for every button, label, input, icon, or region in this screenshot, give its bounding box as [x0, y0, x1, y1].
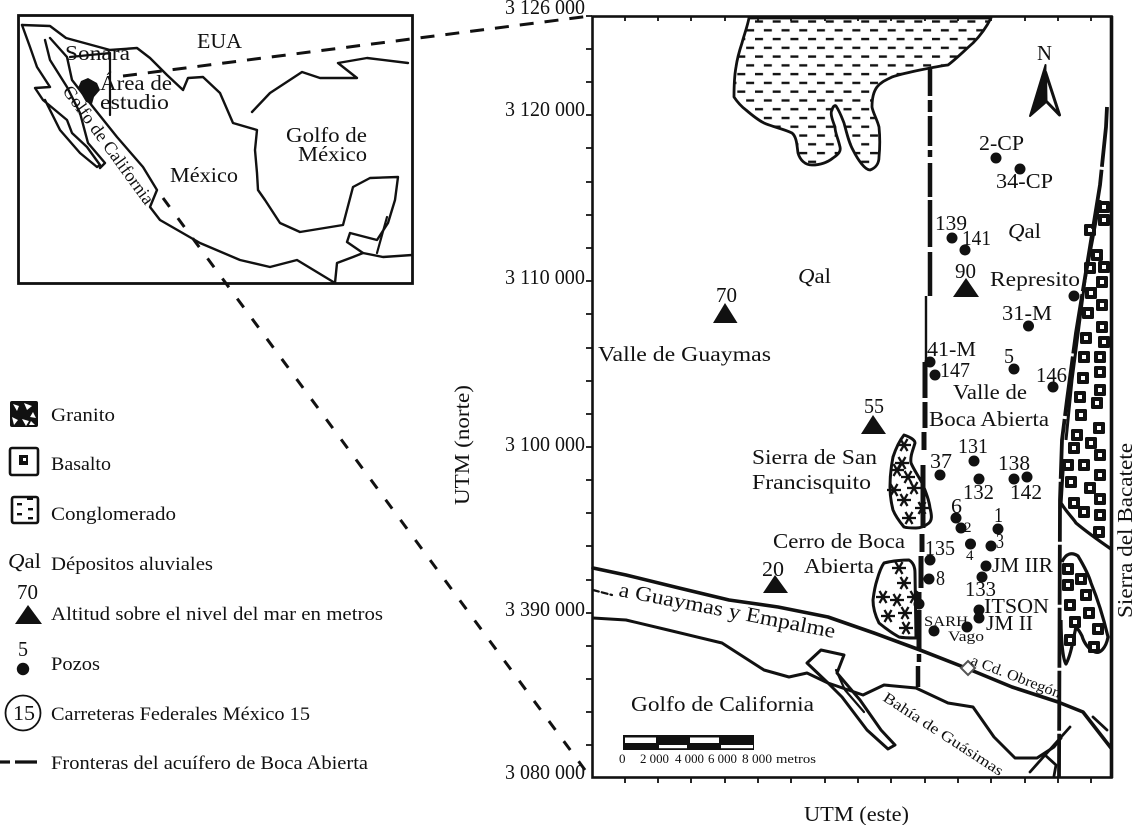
legend: Conglomerado — [12, 497, 176, 525]
altitude marker 70 — [713, 283, 738, 323]
y axis labels: 3 110 000 — [505, 265, 585, 289]
well labels: 142 — [1010, 480, 1042, 504]
well labels: 139 — [935, 211, 967, 235]
label: Sierra de San Francisquito: Francisquito — [752, 470, 871, 494]
inset label: Área de estudio: estudio — [100, 90, 169, 114]
scale bar: 2 000 — [640, 751, 669, 766]
altitude marker 90: 90 — [955, 259, 976, 283]
well labels: 141 — [962, 226, 991, 250]
legend: Basalto: Basalto — [51, 455, 111, 475]
legend: Granito: Granito — [51, 406, 115, 426]
well labels: 2 — [964, 520, 972, 536]
well labels: ITSON — [984, 594, 1049, 618]
label: Cerro de Boca Abierta: Cerro de Boca — [773, 529, 906, 553]
label: Valle de Boca Abierta: Boca Abierta — [929, 407, 1050, 431]
geology: granite Cerro de Boca Abierta — [873, 560, 921, 638]
panel: legend — [0, 401, 383, 774]
well labels: JM II — [986, 611, 1033, 635]
well labels: 5 — [1004, 344, 1014, 368]
label: Valle de Guaymas: Valle de Guaymas — [598, 342, 771, 366]
well labels: 8 — [936, 566, 945, 590]
label: Sierra de San Francisquito: Sierra de San — [752, 445, 878, 469]
inset label: Golfo de California: Golfo de California — [59, 82, 158, 208]
label: a Cd. Obregón: a Cd. Obregón — [969, 653, 1063, 702]
well labels: 3 — [996, 529, 1004, 553]
legend: Qal — [8, 549, 213, 575]
well labels: SARH — [924, 614, 968, 630]
scale bar: 4 000 — [675, 751, 704, 766]
well labels: 2-CP — [979, 131, 1024, 155]
geology: basalt Sierra del Bacatete — [1061, 201, 1111, 549]
legend: federal highway: Carreteras Federales México 15 — [51, 705, 310, 725]
label: a Guaymas y Empalme: a Guaymas y Empalme — [617, 577, 838, 643]
legend: aquifer boundary: Fronteras del acuífero de Boca Abierta — [51, 754, 368, 774]
well labels: 34-CP — [996, 169, 1053, 193]
well labels: 131 — [958, 434, 988, 458]
north arrow — [1030, 41, 1060, 116]
altitude marker 55: 55 — [864, 394, 884, 418]
geology: basalt southern body — [1061, 554, 1108, 664]
north arrow: N — [1037, 41, 1052, 65]
y axis labels: 3 390 000 — [505, 597, 585, 621]
geology: conglomerate — [734, 18, 991, 170]
well labels: 133 — [965, 577, 996, 601]
well labels: 147 — [940, 358, 970, 382]
label: Bahía de Guásimas: Bahía de Guásimas — [880, 690, 1006, 780]
inset label: Área de estudio — [100, 71, 172, 114]
legend: Qal: Dépositos aluviales — [51, 555, 213, 575]
well labels: 41-M — [927, 337, 976, 361]
well labels: 138 — [998, 451, 1030, 475]
inset label: Área de estudio: Área de — [100, 71, 172, 95]
legend: wells: Pozos — [51, 655, 100, 675]
well labels — [924, 131, 1067, 645]
label: Represito: Represito — [990, 267, 1080, 291]
road marker — [961, 661, 975, 675]
panel: inset map of Mexico — [18, 16, 412, 284]
label: Valle de Boca Abierta — [929, 380, 1050, 431]
label: Valle de Boca Abierta: Valle de — [953, 380, 1027, 404]
coastline — [593, 618, 1061, 758]
inset label: Sonara: Sonara — [65, 41, 131, 65]
legend: altitude triangle: 70 — [17, 580, 38, 604]
well labels: 146 — [1036, 363, 1067, 387]
aquifer boundary: east — [1059, 107, 1107, 778]
y axis labels: 3 100 000 — [505, 432, 585, 456]
map frame and ticks — [586, 16, 1112, 783]
well labels: 132 — [963, 480, 994, 504]
well labels: 1 — [994, 503, 1003, 527]
label: Cerro de Boca Abierta: Abierta — [804, 554, 875, 578]
inset label: Golfo de México: México — [298, 142, 367, 166]
well labels: Vago — [948, 629, 984, 645]
y axis title: UTM (norte) — [450, 385, 474, 505]
scale bar: 8 000 — [742, 751, 772, 766]
panel: main map — [586, 16, 1112, 783]
legend: altitude triangle: Altitud sobre el nivel del mar en metros — [51, 605, 383, 625]
label: Qal east: Qal — [1008, 219, 1041, 243]
legend: Basalto — [10, 448, 111, 475]
well labels: 4 — [966, 548, 974, 564]
road: highway 15 — [593, 568, 1111, 748]
inset label: México: México — [170, 163, 238, 187]
y axis labels: 3 120 000 — [505, 97, 585, 121]
legend: wells — [17, 637, 100, 675]
connector dashed line: upper — [123, 16, 590, 76]
inset: study area marker — [78, 78, 100, 104]
scale bar: metros — [776, 751, 816, 766]
well labels: 31-M — [1002, 301, 1052, 325]
estuary — [807, 650, 895, 749]
scale bar: 0 — [619, 751, 626, 766]
y axis labels: 3 080 000 — [505, 760, 585, 784]
legend: federal highway: 15 — [13, 701, 35, 725]
scale bar — [619, 735, 816, 766]
well labels: JM IIR — [992, 553, 1053, 577]
label: Golfo de California: Golfo de California — [631, 692, 815, 716]
altitude marker 70: 70 — [716, 283, 737, 307]
label: Qal west: Qal — [798, 264, 831, 288]
legend: Granito — [10, 401, 115, 427]
connector dashed line: lower — [163, 198, 585, 770]
legend: Qal: Qal — [8, 549, 41, 573]
legend: Conglomerado: Conglomerado — [51, 505, 176, 525]
altitude marker 90 — [953, 259, 979, 297]
inset: coastlines and borders — [22, 25, 412, 283]
scale bar: 6 000 — [708, 751, 737, 766]
geology: granite Sierra de San Francisquito — [887, 435, 931, 528]
well labels: 135 — [925, 536, 955, 560]
inset label: EUA: EUA — [197, 29, 243, 53]
bottom right road segments — [1030, 717, 1107, 776]
inset label: Golfo de México: Golfo de — [286, 123, 367, 147]
aquifer boundary: west — [918, 68, 930, 687]
inset label: Golfo de México — [286, 123, 367, 166]
wells — [914, 152, 1080, 636]
well labels: 37 — [930, 449, 952, 473]
altitude marker 55 — [861, 394, 886, 434]
altitude marker 20 — [762, 557, 788, 593]
well labels: 6 — [951, 494, 962, 518]
altitude marker 20: 20 — [762, 557, 784, 581]
legend: federal highway — [6, 696, 310, 730]
y axis labels — [505, 0, 585, 784]
legend: wells: 5 — [18, 637, 28, 661]
legend: altitude triangle — [15, 580, 383, 625]
label: Sierra de San Francisquito — [752, 445, 878, 494]
label: Cerro de Boca Abierta — [773, 529, 906, 578]
